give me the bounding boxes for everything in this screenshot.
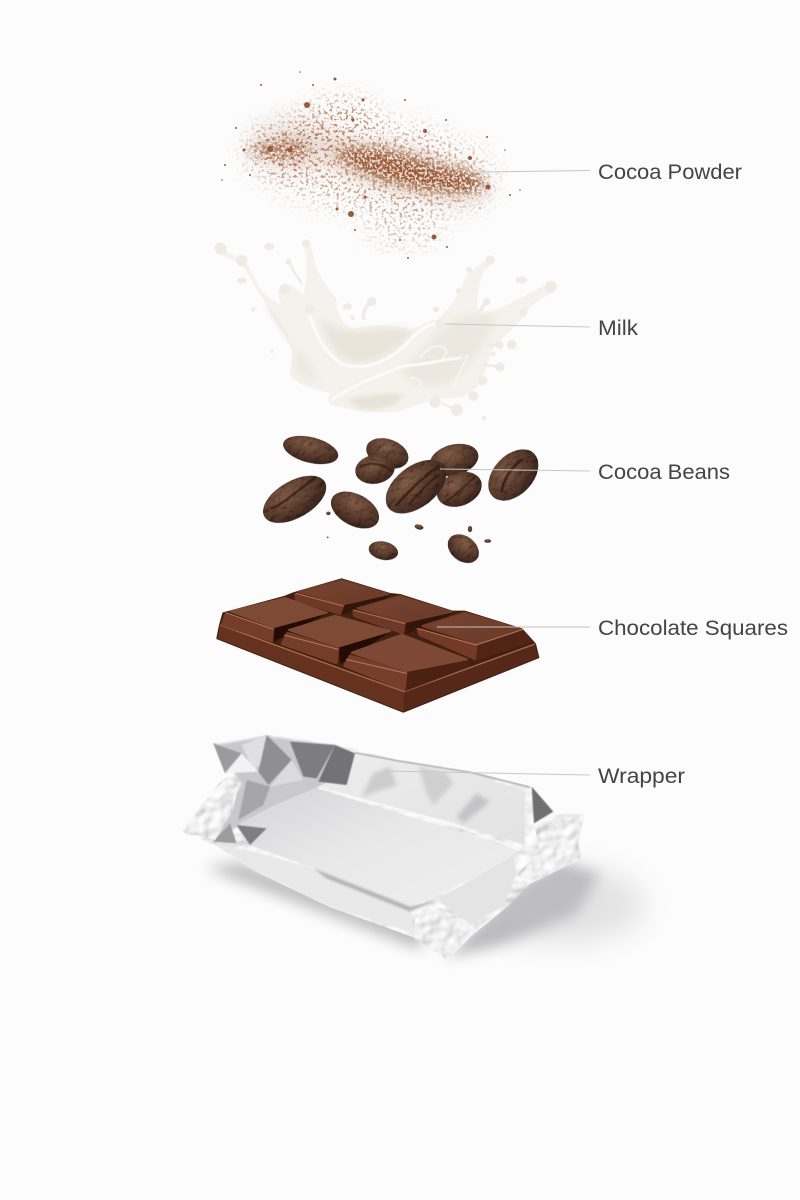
leader line: cocoa beans	[440, 469, 590, 471]
lower foil fold	[213, 843, 415, 933]
inner panel	[237, 788, 520, 907]
top flap	[318, 753, 525, 845]
illustration: milk splash crown	[215, 239, 557, 420]
droplets	[215, 239, 557, 420]
illustration: chocolate bar	[217, 579, 538, 712]
base plate	[217, 625, 404, 712]
illustration: foil wrapper	[182, 735, 645, 960]
label: cocoa beans: Cocoa Beans	[598, 461, 730, 484]
front square	[344, 635, 470, 691]
foil body	[182, 735, 583, 960]
left square	[222, 598, 328, 642]
top crumple facets	[213, 735, 553, 845]
silhouette fill	[217, 579, 538, 712]
leader line: cocoa powder	[480, 170, 590, 172]
right square	[417, 613, 532, 661]
label: cocoa powder: Cocoa Powder	[598, 161, 742, 184]
highlights and folds	[307, 308, 467, 400]
bean creases	[272, 460, 522, 508]
top edge crease	[355, 753, 530, 787]
illustration: cocoa powder cloud	[221, 71, 521, 259]
right end crimp	[517, 815, 583, 883]
leader line: milk	[445, 324, 590, 327]
bean group	[255, 431, 548, 569]
label: chocolate squares: Chocolate Squares	[598, 617, 788, 640]
illustration: cocoa beans	[255, 431, 548, 569]
back centre square	[295, 580, 390, 615]
upper-left foil mass	[215, 736, 355, 842]
bottom end crimp	[413, 907, 503, 960]
label: milk: Milk	[598, 317, 639, 340]
label: wrapper: Wrapper	[598, 765, 685, 788]
middle square	[353, 596, 453, 634]
splash body	[216, 243, 557, 412]
inner bowl shading	[320, 317, 413, 363]
wrapper shadows	[205, 862, 645, 958]
leader line: chocolate squares	[437, 626, 590, 628]
left end crimp	[182, 777, 238, 840]
leader line: wrapper	[385, 771, 590, 775]
centre square	[282, 616, 392, 664]
